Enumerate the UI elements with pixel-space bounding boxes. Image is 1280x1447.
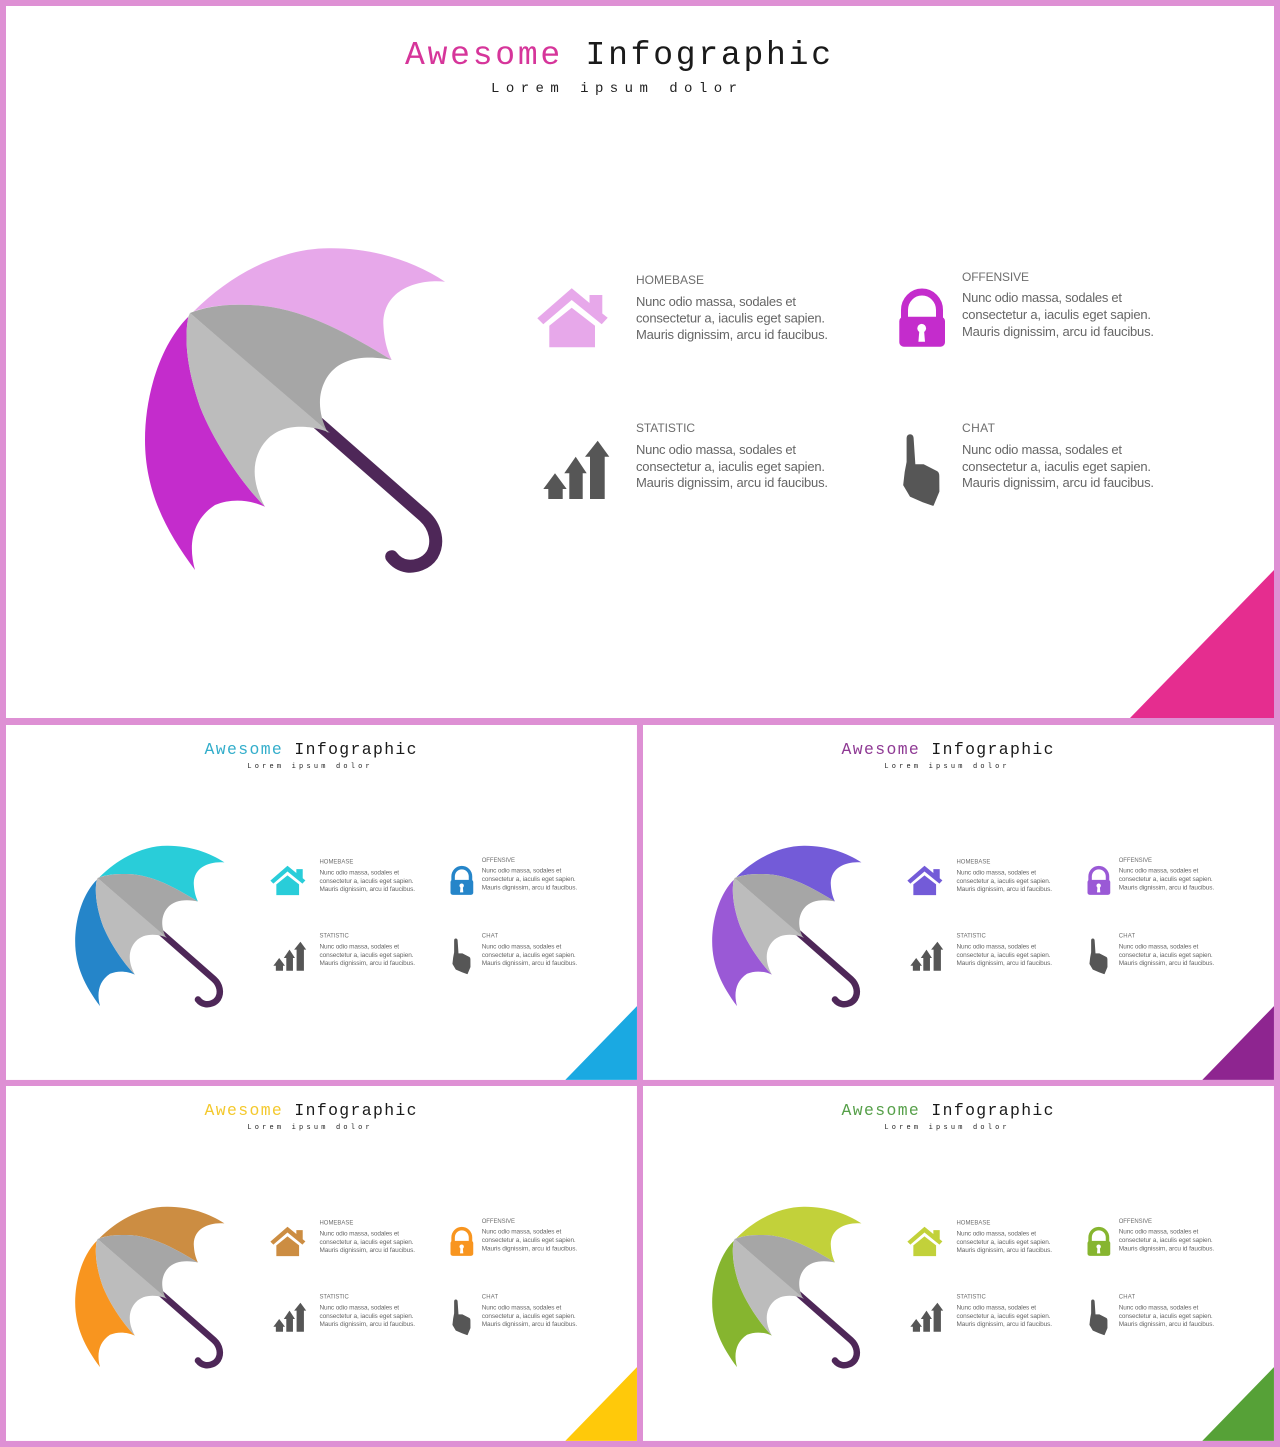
text block: offensive: Mauris dignissim, arcu id faucibus.: [962, 324, 1154, 339]
text block: offensive: [1119, 1219, 1214, 1253]
text block: offensive: consectetur a, iaculis eget sapien.: [962, 307, 1151, 322]
panel background: [6, 1086, 637, 1441]
text block: statistic: [319, 933, 415, 967]
umbrella illustration: [75, 1207, 224, 1367]
text block: homebase: Mauris dignissim, arcu id faucibus.: [636, 327, 828, 342]
text block: homebase: Nunc odio massa, sodales et: [319, 870, 399, 877]
text block: statistic: Nunc odio massa, sodales et: [956, 1304, 1036, 1311]
text block: homebase: HOMEBASE: [319, 860, 353, 866]
text block: offensive: Mauris dignissim, arcu id faucibus.: [1119, 885, 1214, 892]
panel background: [6, 725, 637, 1080]
text block: homebase: Mauris dignissim, arcu id faucibus.: [956, 886, 1052, 893]
text block: statistic: STATISTIC: [636, 421, 695, 435]
text block: homebase: consectetur a, iaculis eget sapien.: [319, 878, 414, 885]
text block: offensive: consectetur a, iaculis eget sapien.: [482, 1237, 576, 1244]
panel background: [643, 1086, 1274, 1441]
text block: statistic: consectetur a, iaculis eget sapien.: [319, 952, 414, 959]
text block: statistic: consectetur a, iaculis eget sapien.: [319, 1313, 414, 1320]
text block: homebase: Mauris dignissim, arcu id faucibus.: [956, 1247, 1052, 1254]
text block: statistic: Mauris dignissim, arcu id faucibus.: [319, 960, 415, 967]
icon: padlock: [451, 868, 473, 895]
text block: chat: consectetur a, iaculis eget sapien.: [482, 1313, 576, 1320]
panel: purple umbrella slide: [643, 725, 1274, 1080]
text block: offensive: Mauris dignissim, arcu id faucibus.: [482, 885, 577, 892]
text block: statistic: Mauris dignissim, arcu id faucibus.: [636, 475, 828, 490]
corner triangle: [565, 1006, 637, 1080]
text block: chat: CHAT: [482, 1294, 498, 1300]
icon: pointing hand: [904, 435, 939, 505]
icon: house: [270, 1227, 305, 1256]
panel: orange umbrella slide: [6, 1086, 637, 1441]
text block: chat: [1119, 1294, 1214, 1328]
title: Awesome Infographic: [842, 1101, 1054, 1120]
text block: statistic: Nunc odio massa, sodales et: [636, 442, 796, 457]
panel: green umbrella slide: [643, 1086, 1274, 1441]
text block: chat: consectetur a, iaculis eget sapien.: [962, 459, 1151, 474]
corner triangle: [1202, 1006, 1274, 1080]
text block: homebase: Nunc odio massa, sodales et: [636, 294, 796, 309]
icon: house: [270, 866, 305, 895]
subtitle: Lorem ipsum dolor: [247, 1124, 370, 1132]
text block: chat: [962, 421, 1154, 490]
subtitle: Lorem ipsum dolor: [884, 1124, 1007, 1132]
text block: statistic: [956, 1294, 1052, 1328]
panel background: [6, 6, 1274, 718]
text block: statistic: [319, 1294, 415, 1328]
text block: statistic: STATISTIC: [956, 1294, 987, 1300]
icon: house: [907, 1227, 942, 1256]
icon: rising arrows: [273, 942, 306, 971]
icon: pointing hand: [1090, 939, 1107, 974]
subtitle: Lorem ipsum dolor: [491, 81, 737, 97]
text block: chat: Mauris dignissim, arcu id faucibus.: [962, 475, 1154, 490]
text block: offensive: consectetur a, iaculis eget sapien.: [1119, 1237, 1213, 1244]
text block: homebase: [319, 860, 415, 893]
text block: homebase: Nunc odio massa, sodales et: [956, 870, 1036, 877]
text block: statistic: consectetur a, iaculis eget sapien.: [636, 459, 825, 474]
text block: chat: CHAT: [1119, 933, 1135, 939]
subtitle: Lorem ipsum dolor: [247, 763, 370, 771]
text block: offensive: consectetur a, iaculis eget sapien.: [482, 876, 576, 883]
text block: chat: Nunc odio massa, sodales et: [962, 442, 1122, 457]
text block: statistic: Mauris dignissim, arcu id faucibus.: [319, 1321, 415, 1328]
text block: chat: Nunc odio massa, sodales et: [1119, 1304, 1199, 1311]
text block: chat: Mauris dignissim, arcu id faucibus.: [1119, 1321, 1214, 1328]
text block: statistic: [956, 933, 1052, 967]
icon: rising arrows: [273, 1303, 306, 1332]
text block: statistic: STATISTIC: [319, 933, 350, 939]
icon: padlock: [451, 1229, 473, 1256]
text block: offensive: [482, 858, 577, 892]
icon: rising arrows: [910, 942, 943, 971]
text block: statistic: Nunc odio massa, sodales et: [319, 1304, 399, 1311]
text block: chat: [482, 1294, 577, 1328]
text block: offensive: OFFENSIVE: [962, 270, 1029, 284]
text block: statistic: Nunc odio massa, sodales et: [956, 943, 1036, 950]
text block: offensive: [1119, 858, 1214, 892]
text block: chat: Mauris dignissim, arcu id faucibus.: [482, 1321, 577, 1328]
text block: homebase: Mauris dignissim, arcu id faucibus.: [319, 1247, 415, 1254]
text block: offensive: OFFENSIVE: [1119, 858, 1152, 864]
text block: homebase: Nunc odio massa, sodales et: [319, 1231, 399, 1238]
icon: pointing hand: [1090, 1300, 1107, 1335]
text block: homebase: [956, 1221, 1052, 1254]
text block: offensive: Mauris dignissim, arcu id faucibus.: [482, 1246, 577, 1253]
title: Awesome Infographic: [205, 1101, 417, 1120]
icon: padlock: [1088, 868, 1110, 895]
text block: chat: [1119, 933, 1214, 967]
umbrella illustration: [75, 846, 224, 1006]
panel: cyan umbrella slide: [6, 725, 637, 1080]
text block: statistic: Mauris dignissim, arcu id faucibus.: [956, 1321, 1052, 1328]
text block: homebase: HOMEBASE: [319, 1221, 353, 1227]
text block: offensive: Mauris dignissim, arcu id faucibus.: [1119, 1246, 1214, 1253]
icon: rising arrows: [910, 1303, 943, 1332]
text block: statistic: consectetur a, iaculis eget sapien.: [956, 1313, 1051, 1320]
text block: offensive: OFFENSIVE: [1119, 1219, 1152, 1225]
text block: statistic: Mauris dignissim, arcu id faucibus.: [956, 960, 1052, 967]
text block: offensive: Nunc odio massa, sodales et: [482, 868, 562, 875]
text block: statistic: consectetur a, iaculis eget sapien.: [956, 952, 1051, 959]
text block: chat: consectetur a, iaculis eget sapien.: [1119, 1313, 1213, 1320]
umbrella illustration: [712, 1207, 861, 1367]
text block: offensive: Nunc odio massa, sodales et: [482, 1229, 562, 1236]
text block: homebase: [319, 1221, 415, 1254]
umbrella illustration: [712, 846, 861, 1006]
icon: rising arrows: [543, 441, 609, 499]
text block: chat: consectetur a, iaculis eget sapien.: [482, 952, 576, 959]
text block: chat: Mauris dignissim, arcu id faucibus.: [482, 960, 577, 967]
text block: homebase: [636, 273, 828, 342]
text block: offensive: Nunc odio massa, sodales et: [1119, 1229, 1199, 1236]
icon: house: [907, 866, 942, 895]
text block: offensive: OFFENSIVE: [482, 1219, 515, 1225]
corner triangle: [1202, 1367, 1274, 1441]
text block: statistic: Nunc odio massa, sodales et: [319, 943, 399, 950]
text block: homebase: HOMEBASE: [956, 860, 990, 866]
icon: house: [537, 288, 608, 347]
icon: padlock: [899, 292, 945, 347]
text block: homebase: [956, 860, 1052, 893]
panel: main pink umbrella slide: [6, 6, 1274, 718]
text block: offensive: OFFENSIVE: [482, 858, 515, 864]
text block: chat: Nunc odio massa, sodales et: [482, 1304, 562, 1311]
text block: homebase: HOMEBASE: [956, 1221, 990, 1227]
text block: homebase: Mauris dignissim, arcu id faucibus.: [319, 886, 415, 893]
icon: pointing hand: [453, 939, 470, 974]
text block: chat: Nunc odio massa, sodales et: [482, 943, 562, 950]
text block: chat: CHAT: [482, 933, 498, 939]
corner triangle: [565, 1367, 637, 1441]
umbrella illustration: [145, 248, 445, 570]
icon: padlock: [1088, 1229, 1110, 1256]
text block: homebase: consectetur a, iaculis eget sapien.: [956, 1239, 1051, 1246]
icon: pointing hand: [453, 1300, 470, 1335]
text block: statistic: STATISTIC: [319, 1294, 350, 1300]
title: Awesome Infographic: [205, 740, 417, 759]
text block: chat: [482, 933, 577, 967]
text block: chat: Nunc odio massa, sodales et: [1119, 943, 1199, 950]
text block: statistic: [636, 421, 828, 490]
text block: homebase: consectetur a, iaculis eget sapien.: [636, 310, 825, 326]
title: Awesome Infographic: [405, 37, 831, 74]
text block: homebase: consectetur a, iaculis eget sapien.: [956, 878, 1051, 885]
text block: chat: CHAT: [1119, 1294, 1135, 1300]
title: Awesome Infographic: [842, 740, 1054, 759]
text block: statistic: STATISTIC: [956, 933, 987, 939]
text block: homebase: Nunc odio massa, sodales et: [956, 1231, 1036, 1238]
text block: homebase: HOMEBASE: [636, 273, 704, 287]
corner triangle: [1130, 570, 1274, 718]
text block: offensive: [962, 270, 1154, 339]
text block: chat: CHAT: [962, 421, 996, 435]
subtitle: Lorem ipsum dolor: [884, 763, 1007, 771]
text block: chat: Mauris dignissim, arcu id faucibus.: [1119, 960, 1214, 967]
panel background: [643, 725, 1274, 1080]
text block: offensive: Nunc odio massa, sodales et: [1119, 868, 1199, 875]
text block: homebase: consectetur a, iaculis eget sapien.: [319, 1239, 414, 1246]
text block: chat: consectetur a, iaculis eget sapien.: [1119, 952, 1213, 959]
text block: offensive: Nunc odio massa, sodales et: [962, 290, 1122, 305]
text block: offensive: consectetur a, iaculis eget sapien.: [1119, 876, 1213, 883]
text block: offensive: [482, 1219, 577, 1253]
